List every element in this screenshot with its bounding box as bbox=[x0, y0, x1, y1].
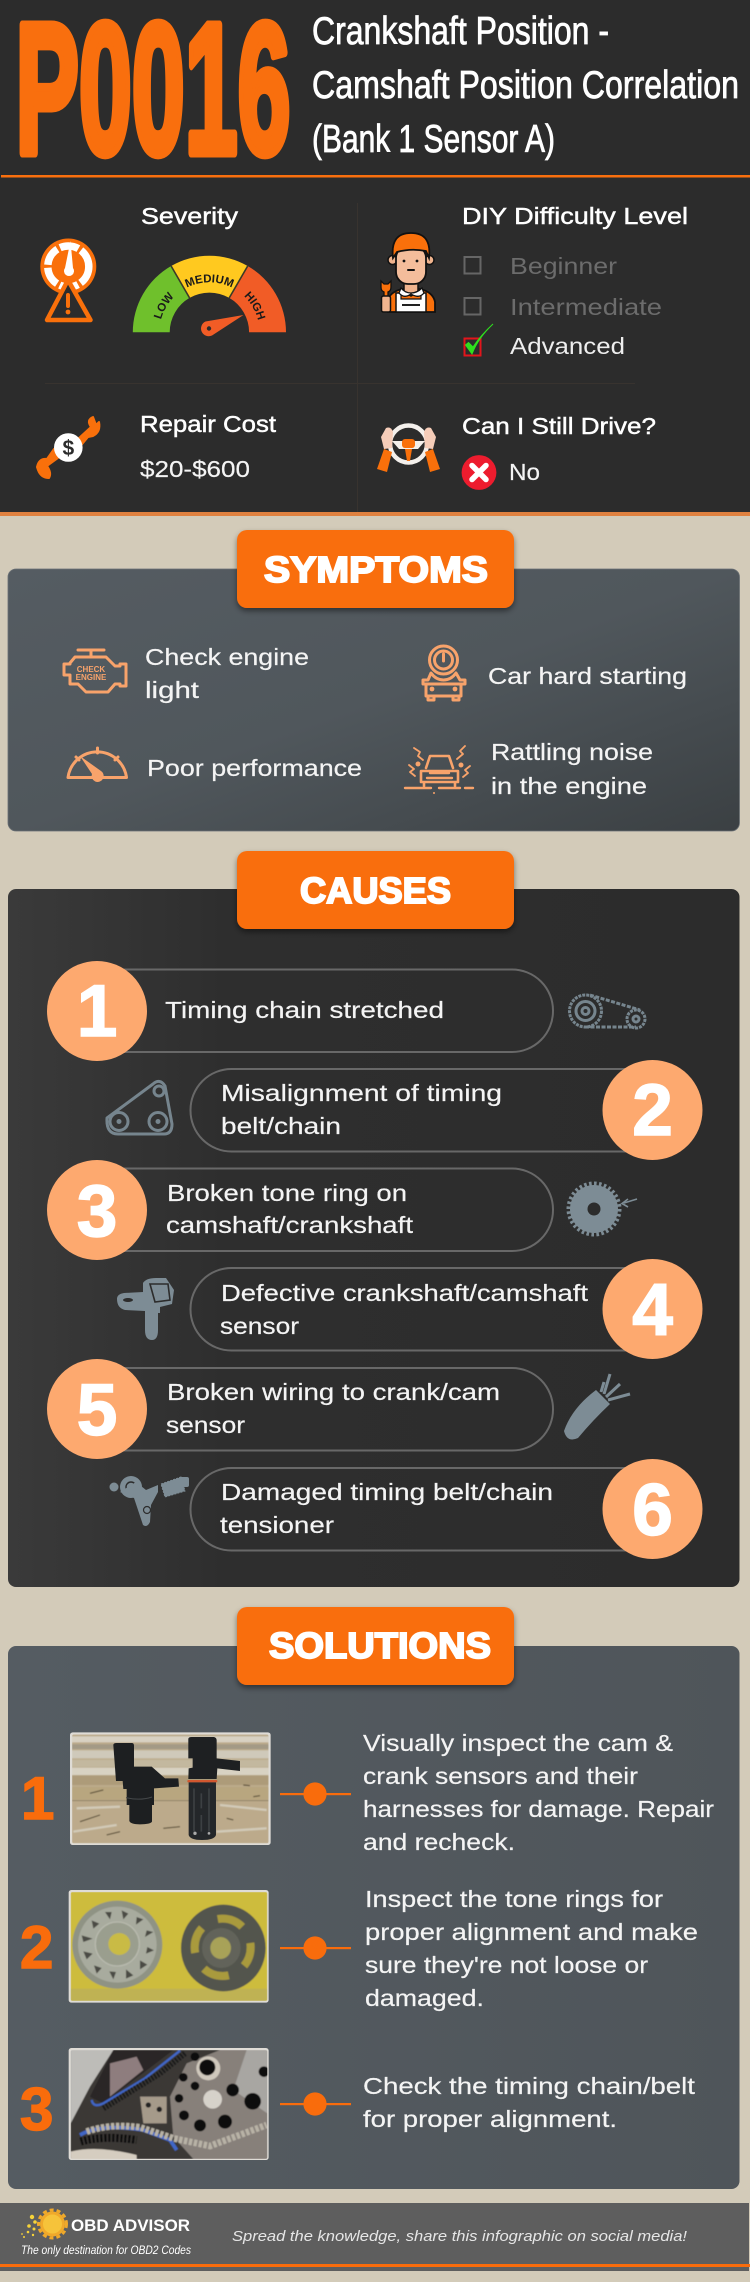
text: Visually inspect the cam & bbox=[363, 1730, 673, 1756]
heading: symptoms bbox=[237, 530, 514, 608]
heading: causes: CAUSES bbox=[300, 870, 451, 911]
panel: causes bbox=[8, 889, 740, 1587]
gauge: low medium high bbox=[132, 256, 286, 336]
symptom: check engine light: light bbox=[145, 677, 200, 703]
cause 5: Broken wiring to crank/cam bbox=[167, 1379, 500, 1405]
symptom: car hard starting: Car hard starting bbox=[488, 663, 687, 689]
solution 2: 2 bbox=[20, 1914, 53, 1981]
panel: solutions bbox=[8, 1646, 740, 2189]
symptom: poor performance bbox=[68, 748, 362, 782]
icon: red cross bbox=[462, 455, 496, 490]
option: advanced checked bbox=[464, 324, 625, 359]
panel: symptoms bbox=[8, 569, 740, 831]
icon: wrench with dollar: $ bbox=[62, 437, 74, 460]
cause 4: Defective crankshaft/camshaft bbox=[221, 1280, 589, 1306]
text bbox=[363, 2073, 696, 2132]
panel: repair cost bbox=[37, 411, 277, 482]
option: intermediate bbox=[464, 294, 662, 320]
cause 1: Timing chain stretched bbox=[165, 997, 444, 1023]
title bbox=[312, 10, 739, 161]
icon: check engine: ENGINE bbox=[76, 673, 107, 682]
heading: solutions: SOLUTIONS bbox=[269, 1625, 491, 1666]
cause 4: sensor bbox=[220, 1313, 299, 1339]
value: no: No bbox=[509, 459, 540, 485]
text: and recheck. bbox=[363, 1829, 515, 1855]
photo: tone rings bbox=[69, 1890, 269, 2003]
icon: rattling car bbox=[405, 746, 473, 794]
cause 5: sensor bbox=[166, 1412, 245, 1438]
text bbox=[363, 1730, 714, 1855]
panel: can I still drive bbox=[377, 413, 656, 490]
icon: wrench with dollar bbox=[37, 417, 99, 478]
photo: cam and crank sensors bbox=[70, 1732, 271, 1845]
heading: DIY difficulty level: DIY Difficulty Level bbox=[462, 203, 688, 229]
icon: timing chain bbox=[570, 995, 645, 1028]
text: harnesses for damage. Repair bbox=[363, 1796, 714, 1822]
option: intermediate: Intermediate bbox=[510, 294, 662, 320]
icon: steering wheel and hands bbox=[377, 426, 440, 472]
text: damaged. bbox=[365, 1985, 484, 2011]
logo: OBD Advisor: The only destination for OBD2 Codes bbox=[21, 2245, 191, 2257]
cause 3 bbox=[47, 1160, 637, 1260]
cause 4: 4 bbox=[632, 1270, 673, 1351]
title: Crankshaft Position - bbox=[312, 10, 609, 53]
icon: tensioner bbox=[110, 1476, 189, 1526]
text: Inspect the tone rings for bbox=[365, 1886, 663, 1912]
footer bbox=[0, 2203, 750, 2271]
cause 3: Broken tone ring on bbox=[167, 1180, 407, 1206]
cause 6: Damaged timing belt/chain bbox=[221, 1479, 553, 1505]
icon: car with power button bbox=[423, 646, 465, 700]
gauge needle bbox=[201, 315, 244, 336]
cause 2: Misalignment of timing bbox=[221, 1080, 502, 1106]
panel: DIY difficulty bbox=[381, 203, 688, 359]
icon: tone ring bbox=[568, 1184, 637, 1234]
symptom: car hard starting bbox=[423, 646, 687, 700]
cause 3: 3 bbox=[77, 1171, 117, 1252]
cause 2 bbox=[107, 1060, 702, 1160]
gauge: low medium high: MEDIUM bbox=[184, 274, 234, 288]
cause 6 bbox=[110, 1459, 702, 1559]
title: (Bank 1 Sensor A) bbox=[312, 118, 555, 161]
cause 6: 6 bbox=[632, 1470, 673, 1551]
panel: severity bbox=[40, 203, 286, 336]
icon: position sensor bbox=[117, 1278, 174, 1340]
solution 3: 3 bbox=[20, 2076, 53, 2143]
icon: check engine: CHECK bbox=[77, 665, 105, 674]
symptom: check engine light bbox=[64, 644, 309, 703]
gauge: low medium high: LOW bbox=[154, 292, 173, 319]
cause 6: tensioner bbox=[220, 1512, 334, 1538]
connector bbox=[280, 1936, 351, 1960]
solution 1 bbox=[21, 1730, 714, 1855]
cause 2: 2 bbox=[632, 1070, 673, 1151]
icon: broken wire bbox=[564, 1374, 630, 1439]
symptom: rattling noise in the engine bbox=[405, 739, 653, 799]
heading: repair cost: Repair Cost bbox=[140, 411, 277, 437]
symptom: check engine light: Check engine bbox=[145, 644, 309, 670]
symptom: poor performance: Poor performance bbox=[147, 755, 362, 781]
cause 4 bbox=[117, 1259, 702, 1359]
symptom: rattling noise in the engine: in the engine bbox=[491, 773, 647, 799]
cause 1: 1 bbox=[77, 971, 117, 1052]
value: repair cost range: $20-$600 bbox=[140, 456, 250, 482]
photo: timing chain bbox=[69, 2048, 269, 2160]
connector bbox=[280, 1782, 351, 1806]
icon: speedometer bbox=[68, 748, 126, 782]
solution 2 bbox=[20, 1886, 698, 2011]
connector bbox=[280, 2092, 351, 2116]
text: sure they're not loose or bbox=[365, 1952, 648, 1978]
option: beginner bbox=[464, 253, 617, 279]
cause 5 bbox=[47, 1359, 630, 1459]
header band bbox=[0, 0, 750, 516]
cause 5: 5 bbox=[77, 1370, 117, 1451]
cause 1 bbox=[47, 961, 645, 1061]
logo: OBD Advisor bbox=[21, 2210, 191, 2257]
solution 1: 1 bbox=[21, 1765, 54, 1832]
cause 2: belt/chain bbox=[221, 1113, 341, 1139]
heading: causes bbox=[237, 851, 514, 929]
cause 3: camshaft/crankshaft bbox=[166, 1212, 414, 1238]
heading: severity: Severity bbox=[141, 203, 238, 229]
logo: OBD Advisor: OBD ADVISOR bbox=[71, 2216, 190, 2235]
solution 3 bbox=[20, 2048, 696, 2160]
symptom: rattling noise in the engine: Rattling noise bbox=[491, 739, 653, 765]
icon: check engine bbox=[64, 650, 126, 692]
share message: Spread the knowledge, share this infographic on social media! bbox=[232, 2228, 688, 2245]
text: for proper alignment. bbox=[363, 2106, 617, 2132]
option: beginner: Beginner bbox=[510, 253, 617, 279]
heading: symptoms: SYMPTOMS bbox=[264, 549, 488, 590]
gauge: low medium high: HIGH bbox=[244, 291, 266, 320]
text: Check the timing chain/belt bbox=[363, 2073, 696, 2099]
icon: belt and pulleys bbox=[107, 1081, 172, 1134]
icon: severity gauge warning bbox=[40, 238, 96, 320]
option: advanced checked: Advanced bbox=[510, 333, 625, 359]
text bbox=[365, 1886, 698, 2011]
heading: can I still drive: Can I Still Drive? bbox=[462, 413, 656, 439]
text: proper alignment and make bbox=[365, 1919, 698, 1945]
heading: solutions bbox=[237, 1607, 514, 1685]
icon: mechanic bbox=[381, 233, 435, 312]
text: crank sensors and their bbox=[363, 1763, 638, 1789]
